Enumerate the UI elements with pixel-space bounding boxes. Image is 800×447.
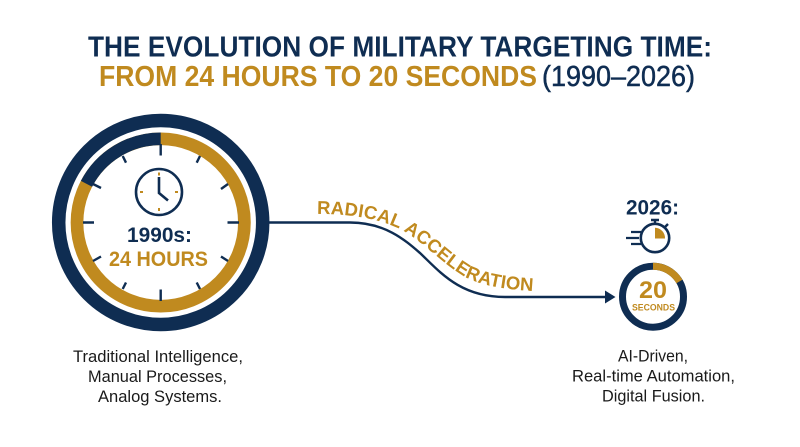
icon: clock [136,169,182,215]
label: 2026: 2026: [626,196,679,220]
caption: 1990s description: Traditional Intelligence, [73,348,243,366]
caption: 1990s description: Analog Systems. [98,388,222,406]
connector arrow [268,222,616,304]
large clock 1990s [59,120,263,324]
inner navy arc [86,139,161,184]
small timer 20 seconds [622,266,684,327]
caption: 2026 description: Digital Fusion. [602,388,705,406]
timer unit: SECONDS [632,302,675,314]
gold arc [653,266,679,281]
clock label: 1990s: 1990s: [127,223,192,247]
caption: 1990s description: Manual Processes, [88,368,227,386]
caption: 2026 description [572,348,735,406]
hour ticks [83,144,239,301]
title [88,32,712,93]
inner gold progress ring [77,139,244,306]
caption: 1990s description [73,348,243,406]
title: FROM 24 HOURS TO 20 SECONDS [99,61,537,93]
timer number: 20 [639,277,667,304]
curved label: radical acceleration: RADICAL ACCELERATION [318,201,533,291]
caption: 2026 description: Real-time Automation, [572,368,735,386]
outer ring [59,120,263,324]
caption: 2026 description: AI-Driven, [618,348,688,366]
clock label: 24 hours: 24 HOURS [109,247,208,271]
timer ring [622,266,684,327]
title: (1990–2026) [542,61,695,93]
title: THE EVOLUTION OF MILITARY TARGETING TIME: [88,32,712,64]
icon: stopwatch [626,220,669,252]
